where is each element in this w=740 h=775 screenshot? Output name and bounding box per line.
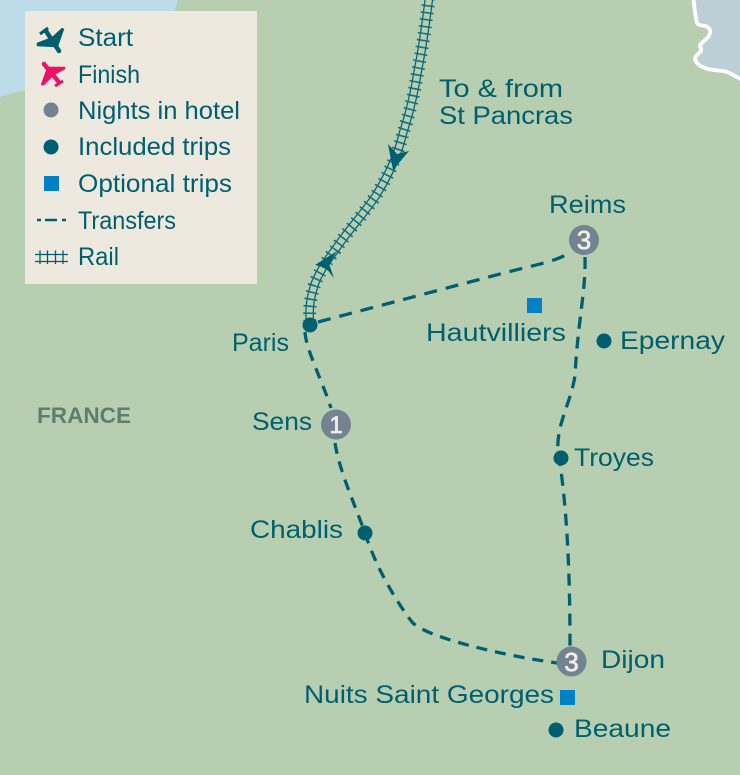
legend icon: optional trips [44,176,59,191]
rail direction arrow: southbound [388,144,409,170]
stop: Reims, 3 nights: 3 [577,225,591,255]
sea: English Channel [0,0,178,97]
stop: Chablis [250,516,372,544]
stop: Troyes: Troyes [574,444,654,472]
legend label: Optional trips: Optional trips [78,170,232,198]
legend label: Start: Start [78,24,133,52]
legend icon: nights in hotel [44,102,58,118]
transfer route: Paris to Sens [305,332,331,408]
legend icon: finish plane [41,64,65,86]
label: St Pancras: St Pancras [439,102,573,130]
stop: Paris [232,318,318,357]
transfer route: Sens to Dijon via Chablis [335,443,557,663]
stop: Reims, 3 nights [549,191,626,255]
legend icon: rail [35,250,68,264]
legend icon: start plane [37,28,64,51]
stop: Sens, 1 night: 1 [329,412,343,439]
stop: Chablis: Chablis [250,516,343,544]
label: To & from: To & from [439,75,563,103]
legend label: Finish: Finish [78,61,140,89]
rail direction arrow: northbound [315,251,337,278]
stop: Sens, 1 night [252,408,351,440]
legend label: Rail: Rail [78,243,119,271]
transfer route: Paris to Reims [318,253,569,322]
stop: Dijon, 3 nights [556,646,665,677]
legend icon: transfers [37,219,66,221]
stop: Paris: Paris [232,329,289,357]
stop: Beaune: Beaune [574,715,671,743]
legend label: Transfers: Transfers [78,207,176,235]
stop: Sens, 1 night: Sens [252,408,312,436]
neighbouring country with white border [693,0,740,81]
legend icon: included trips [44,140,58,154]
legend panel [25,11,257,284]
rail line to St Pancras [310,0,429,322]
stop: Dijon, 3 nights: Dijon [601,646,665,674]
legend label: Included trips: Included trips [78,133,231,161]
optional stop: Hautvilliers: Hautvilliers [426,319,566,347]
stop: Dijon, 3 nights: 3 [564,647,579,677]
transfer route: Reims to Dijon via Troyes [558,257,585,647]
optional stop: Nuits Saint Georges: Nuits Saint Georges [304,681,554,709]
stop: Epernay: Epernay [620,327,726,355]
country label: France: FRANCE [37,403,131,428]
optional stop: Hautvilliers [426,298,566,347]
legend label: Nights in hotel: Nights in hotel [78,97,240,125]
stop: Reims, 3 nights: Reims [549,191,626,219]
